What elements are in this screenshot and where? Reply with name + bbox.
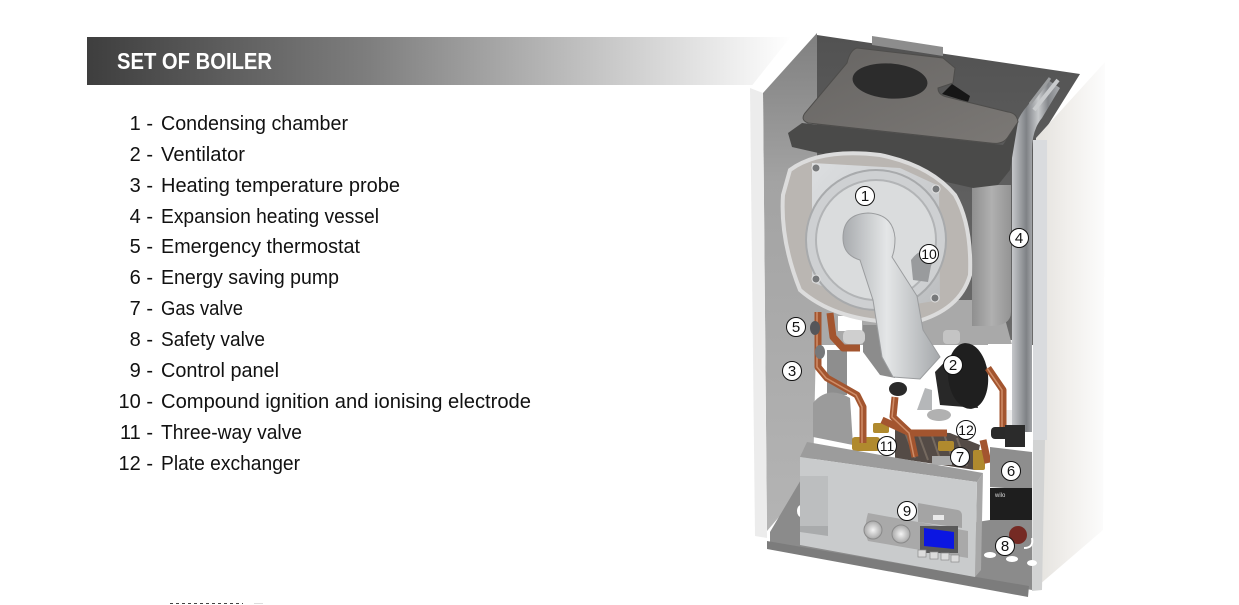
list item 4: 4 - xyxy=(130,206,153,228)
list item 1: 1 - xyxy=(130,113,153,135)
marker 2 xyxy=(944,356,962,374)
marker 5: 5 xyxy=(792,319,800,336)
marker 5 xyxy=(786,318,806,336)
display xyxy=(920,526,958,553)
grey duct xyxy=(827,350,847,395)
plate exchanger xyxy=(895,430,980,470)
floor tray xyxy=(770,478,1032,590)
list item 9: Control panel xyxy=(161,360,279,382)
marker 12: 12 xyxy=(958,422,974,438)
title banner xyxy=(87,37,792,85)
control box top xyxy=(800,442,983,482)
marker 6 xyxy=(1002,462,1020,480)
cover bolts xyxy=(812,164,940,302)
cabinet top rim xyxy=(750,10,1105,590)
list item 10: Compound ignition and ionising electrode xyxy=(161,391,531,413)
marker 10 xyxy=(920,244,938,264)
list item 9: 9 - xyxy=(130,360,153,382)
ventilator fan xyxy=(917,330,991,421)
marker 6: 6 xyxy=(1007,463,1015,480)
cabinet left edge xyxy=(750,88,767,538)
cabinet left wall xyxy=(763,33,817,531)
control box side xyxy=(975,473,983,577)
list item 2: Ventilator xyxy=(161,144,245,166)
list item 11: Three-way valve xyxy=(161,422,302,444)
marker 10: 10 xyxy=(921,246,937,262)
exchanger mount plate xyxy=(812,163,940,310)
tray front lip xyxy=(767,541,1029,597)
list item 12: Plate exchanger xyxy=(161,453,300,475)
marker 8 xyxy=(996,536,1014,556)
white gaps between pipes xyxy=(838,316,1012,430)
expansion heating vessel xyxy=(972,185,1011,326)
list item 10: 10 - xyxy=(119,391,153,413)
list item 5: Emergency thermostat xyxy=(161,236,360,258)
list item 6: 6 - xyxy=(130,267,153,289)
bypass casting xyxy=(813,393,853,445)
list item 7 xyxy=(130,298,243,320)
marker 7: 7 xyxy=(956,449,964,466)
list item 8: 8 - xyxy=(130,329,153,351)
silver flow tube xyxy=(1012,78,1060,432)
list item 12: 12 - xyxy=(119,453,153,475)
energy saving pump xyxy=(990,447,1032,520)
marker 11: 11 xyxy=(880,438,894,454)
marker 9: 9 xyxy=(903,503,911,520)
knob right xyxy=(892,525,910,543)
marker 2: 2 xyxy=(949,357,957,374)
list item 3: Heating temperature probe xyxy=(161,175,400,197)
parts list xyxy=(119,113,531,475)
marker 12 xyxy=(956,420,976,440)
outer exchanger shell xyxy=(783,153,970,322)
control box front xyxy=(800,457,977,577)
tray holes xyxy=(797,505,1037,566)
list item 6: Energy saving pump xyxy=(161,267,339,289)
dark notch behind lid xyxy=(942,84,970,102)
heading: set of boiler: SET OF BOILER xyxy=(117,48,272,74)
marker 1: 1 xyxy=(861,188,869,205)
pipe highlights xyxy=(817,312,1002,457)
gas valve xyxy=(932,456,952,465)
safety valve xyxy=(1009,526,1032,548)
brass fittings xyxy=(852,423,985,470)
right side panel xyxy=(1032,62,1105,591)
marker 7 xyxy=(950,448,970,466)
list item 7: 7 - xyxy=(130,298,153,320)
condensing chamber lid side xyxy=(788,122,1018,188)
burner body behind arm xyxy=(863,325,895,378)
boiler illustration xyxy=(750,10,1105,597)
list item 11: 11 - xyxy=(120,422,153,444)
list item 8: Safety valve xyxy=(161,329,265,351)
copper pipes xyxy=(818,312,1003,463)
list item 2: 2 - xyxy=(130,144,153,166)
marker 8: 8 xyxy=(1001,538,1009,555)
marker 3: 3 xyxy=(788,363,796,380)
exchanger round cover xyxy=(806,170,946,310)
list item 4: Expansion heating vessel xyxy=(161,206,379,228)
control panel fascia xyxy=(864,503,968,562)
marker 1 xyxy=(856,186,874,206)
knob left xyxy=(864,521,882,539)
air inlet arm xyxy=(843,213,940,379)
list item 7: Gas valve xyxy=(161,298,243,320)
flue mounting tab xyxy=(872,36,943,56)
pipe insulation and probes xyxy=(810,321,1025,447)
marker 9 xyxy=(898,502,916,520)
ignition electrode xyxy=(911,251,933,282)
back wall xyxy=(817,35,1080,345)
marker 4: 4 xyxy=(1015,230,1023,247)
list item 3: 3 - xyxy=(130,175,153,197)
energy saving pump: wilo xyxy=(994,493,1006,499)
marker 11 xyxy=(878,436,896,456)
buttons xyxy=(918,550,959,562)
list item 1: Condensing chamber xyxy=(161,113,348,135)
marker 4 xyxy=(1010,228,1028,248)
condensing chamber lid top xyxy=(803,48,1018,143)
list item 5: 5 - xyxy=(130,236,153,258)
marker 3 xyxy=(782,362,802,380)
flue hole xyxy=(851,61,929,101)
